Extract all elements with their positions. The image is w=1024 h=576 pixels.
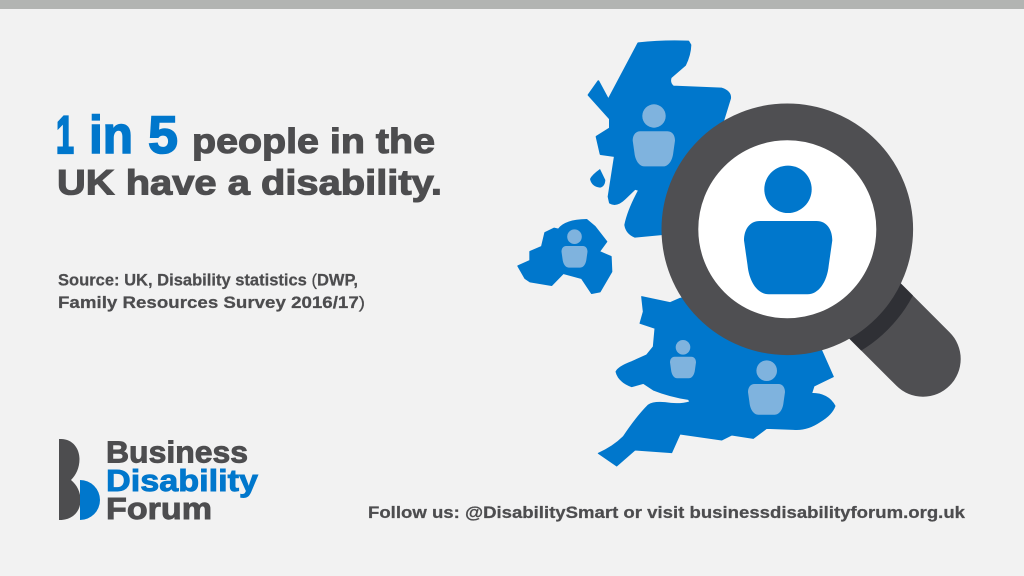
icon: person in Northern Ireland [562,229,588,268]
logo wordmark: Business [106,434,248,470]
icon: magnifying glass [645,87,929,371]
headline [56,106,442,202]
source note: Source: UK, Disability statistics (DWP, [58,270,358,290]
map of the UK [518,41,835,466]
icon: person in Scotland [633,104,675,166]
follow-us line: Follow us: @DisabilitySmart or visit businessdisabilityforum.org.uk [368,503,966,522]
icon: person in England [748,360,785,415]
headline: UK have a disability. [57,164,442,202]
logo: Business Disability Forum [59,434,259,526]
source note [58,270,365,312]
magnifier handle [833,269,923,359]
logo wordmark [106,434,259,526]
map: Hebridean island [590,169,605,188]
icon: person in lens [744,166,832,294]
headline: in [89,106,133,165]
icon: person in Wales [670,340,696,378]
map: Scotland [589,41,730,237]
magnifier lens [680,122,895,337]
map: Northern Ireland [518,220,612,293]
magnifier collar [849,284,913,350]
headline: people in the [192,122,435,161]
map: England and Wales [598,290,835,466]
source note: Family Resources Survey 2016/17 ) [58,293,365,312]
logo wordmark: Disability [106,463,259,498]
headline: 5 [148,106,178,165]
logo mark [59,439,100,520]
headline: 1 [56,106,74,165]
logo wordmark: Forum [106,491,212,526]
